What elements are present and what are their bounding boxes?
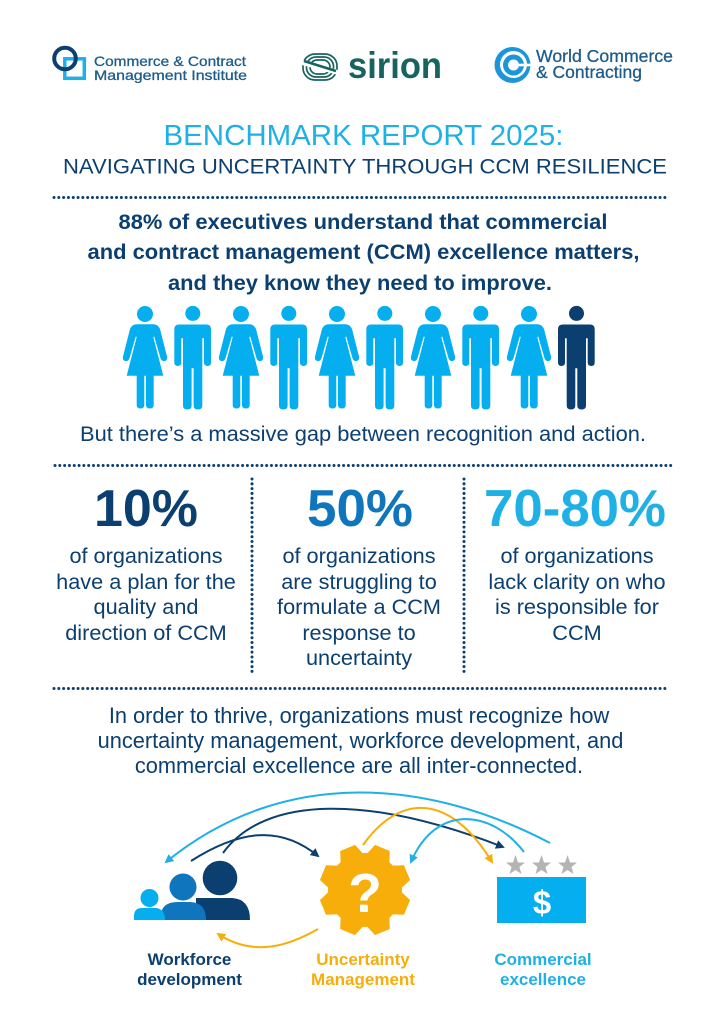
logo: Sirion: sirion xyxy=(348,45,442,86)
stat: 50%: of organizations xyxy=(282,543,436,568)
label: workforce development xyxy=(137,950,242,989)
label: uncertainty management: Uncertainty xyxy=(316,950,410,969)
logo: World Commerce & Contracting: World Commerce xyxy=(536,46,673,66)
icon: stars and dollar bill xyxy=(497,855,586,923)
arrow: commercial to uncertainty xyxy=(411,819,524,862)
headline statement: 88% of executives understand that commercial xyxy=(118,210,608,234)
conclusion statement xyxy=(98,703,623,778)
icon: gear with question mark: ? xyxy=(348,862,382,924)
label: workforce development: Workforce xyxy=(148,950,231,969)
label: commercial excellence: excellence xyxy=(500,970,586,989)
headline statement: and contract management (CCM) excellence matters, xyxy=(88,240,640,264)
logo: Commerce & Contract Management Institute: Management Institute xyxy=(94,67,247,83)
title: NAVIGATING UNCERTAINTY THROUGH CCM RESILIENCE xyxy=(63,154,667,178)
logo: Commerce & Contract Management Institute: Commerce & Contract xyxy=(94,53,246,69)
stat: 70-80%: of organizations xyxy=(500,543,654,568)
stat: 50%: are struggling to xyxy=(281,569,437,594)
conclusion statement: commercial excellence are all inter-connected. xyxy=(135,753,583,778)
stat: 50%: response to xyxy=(302,620,416,645)
stat: 70-80%: 70-80% xyxy=(484,480,666,538)
logo: World Commerce & Contracting: & Contracting xyxy=(536,62,642,82)
stat: 50%: uncertainty xyxy=(306,645,412,670)
stat: 70-80%: is responsible for xyxy=(495,594,659,619)
label: uncertainty management xyxy=(311,950,415,989)
label: uncertainty management: Management xyxy=(311,970,415,989)
stat: 10%: quality and xyxy=(94,594,198,619)
arrow: commercial to workforce xyxy=(166,792,550,862)
stat: 10%: direction of CCM xyxy=(65,620,227,645)
arrow: workforce to commercial xyxy=(223,809,503,853)
pictogram: nine in ten people highlighted xyxy=(123,306,595,410)
conclusion statement: uncertainty management, workforce development, and xyxy=(98,728,623,753)
stat: 70-80% xyxy=(484,480,666,645)
label: commercial excellence: Commercial xyxy=(494,950,592,969)
logo: Sirion xyxy=(302,45,442,86)
title: BENCHMARK REPORT 2025: xyxy=(164,120,564,152)
label: workforce development: development xyxy=(137,970,242,989)
headline statement: and they know they need to improve. xyxy=(168,271,552,295)
stat: 10%: have a plan for the xyxy=(56,569,236,594)
logo: Commerce & Contract Management Institute xyxy=(54,48,247,83)
arrow: uncertainty to commercial xyxy=(363,808,492,862)
label: commercial excellence xyxy=(494,950,592,989)
gap statement: But there’s a massive gap between recognition and action. xyxy=(80,422,646,446)
arrow: workforce to uncertainty xyxy=(191,835,318,861)
stat: 10%: of organizations xyxy=(69,543,223,568)
title xyxy=(63,120,667,178)
stat: 50%: 50% xyxy=(307,480,413,538)
logo: World Commerce & Contracting xyxy=(494,46,673,83)
icon: stars and dollar bill: $ xyxy=(533,884,551,921)
stat: 10%: 10% xyxy=(94,480,198,538)
icon: gear with question mark xyxy=(318,843,412,937)
headline statement xyxy=(88,210,640,295)
stat: 50% xyxy=(277,480,441,670)
stat: 10% xyxy=(56,480,236,645)
arrow: uncertainty to workforce xyxy=(218,929,318,947)
stat: 70-80%: CCM xyxy=(552,620,602,645)
stat: 50%: formulate a CCM xyxy=(277,594,441,619)
stat: 70-80%: lack clarity on who xyxy=(488,569,666,594)
icon: workforce people xyxy=(134,861,250,920)
conclusion statement: In order to thrive, organizations must recognize how xyxy=(109,703,609,728)
